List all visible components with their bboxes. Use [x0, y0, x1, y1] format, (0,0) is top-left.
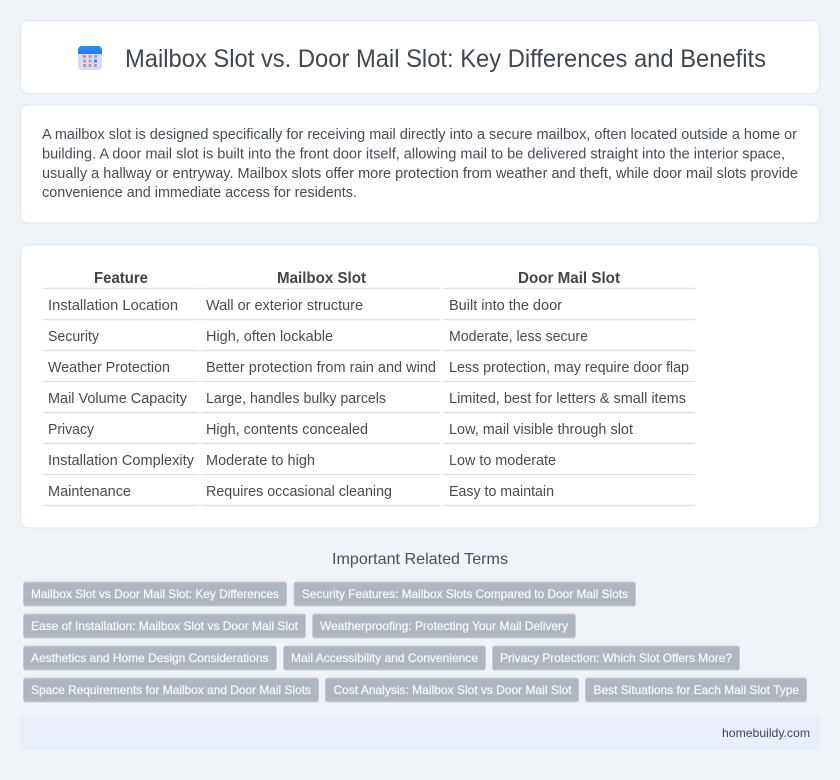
row: mail volume capacity: Mail Volume Capacity	[48, 391, 188, 407]
row: privacy	[48, 422, 633, 438]
intro paragraph: A mailbox slot is designed specifically for receiving mail directly into a secure mailbox, often located outside a home or	[42, 127, 797, 143]
tag: best situations	[586, 678, 806, 702]
tag: privacy protection	[492, 646, 740, 670]
row: installation location: Built into the door	[449, 298, 562, 314]
tag: accessibility: Mail Accessibility and Convenience	[291, 651, 478, 665]
tag: cost analysis	[326, 678, 578, 702]
table header row	[94, 270, 621, 287]
related term tags	[24, 582, 806, 702]
table header row: Feature	[94, 270, 148, 287]
tag: aesthetics: Aesthetics and Home Design Considerations	[31, 651, 268, 665]
heading: related terms: Important Related Terms	[332, 551, 508, 568]
row: weather protection: Less protection, may require door flap	[449, 360, 689, 376]
tag: weatherproofing	[312, 614, 576, 638]
row: mail volume capacity: Limited, best for letters & small items	[449, 391, 686, 407]
row: security	[48, 329, 588, 345]
row: privacy: Privacy	[48, 422, 95, 438]
row: maintenance	[48, 484, 554, 500]
tag: privacy protection: Privacy Protection: Which Slot Offers More?	[500, 651, 732, 665]
tag: space requirements: Space Requirements for Mailbox and Door Mail Slots	[31, 683, 311, 697]
row: security: Moderate, less secure	[449, 329, 588, 345]
tag: ease of installation	[24, 614, 306, 638]
row: installation complexity: Installation Complexity	[48, 453, 195, 469]
intro paragraph: building. A door mail slot is built into the front door itself, allowing mail to be delivered straight into the interior space,	[42, 146, 785, 162]
row: maintenance: Easy to maintain	[449, 484, 554, 500]
row: privacy: High, contents concealed	[206, 422, 368, 438]
row: installation complexity: Moderate to high	[206, 453, 315, 469]
panel: title header	[20, 20, 820, 94]
tag: ease of installation: Ease of Installation: Mailbox Slot vs Door Mail Slot	[31, 619, 299, 633]
row: mail volume capacity	[48, 391, 686, 407]
footer source: homebuildy.com	[722, 726, 810, 740]
tag: aesthetics	[24, 646, 276, 670]
row: security: Security	[48, 329, 100, 345]
intro paragraph	[42, 127, 798, 201]
icon: calendar grid	[78, 46, 102, 70]
row: weather protection: Better protection from rain and wind	[206, 360, 436, 376]
tag: security features	[294, 582, 636, 606]
intro paragraph: usually a hallway or entryway. Mailbox slots offer more protection from weather and theft, while door mail slots provide	[42, 166, 798, 182]
tag: key differences	[24, 582, 286, 606]
panel: intro text	[20, 105, 820, 223]
tag: accessibility	[284, 646, 486, 670]
tag: cost analysis: Cost Analysis: Mailbox Slot vs Door Mail Slot	[334, 683, 572, 697]
row: installation location	[48, 298, 562, 314]
panel: comparison table	[20, 245, 820, 528]
table header row: Mailbox Slot	[277, 270, 367, 287]
title: Mailbox Slot vs. Door Mail Slot: Key Differences and Benefits	[125, 45, 766, 73]
row: weather protection	[48, 360, 689, 376]
row: installation complexity: Low to moderate	[449, 453, 556, 469]
row: maintenance: Maintenance	[48, 484, 131, 500]
row: mail volume capacity: Large, handles bulky parcels	[206, 391, 386, 407]
tag: security features: Security Features: Mailbox Slots Compared to Door Mail Slots	[302, 587, 628, 601]
tag: key differences: Mailbox Slot vs Door Mail Slot: Key Differences	[31, 587, 279, 601]
row: installation location: Installation Location	[48, 298, 178, 314]
intro paragraph: convenience and immediate access for residents.	[42, 185, 357, 201]
row: privacy: Low, mail visible through slot	[449, 422, 633, 438]
row: installation complexity	[48, 453, 556, 469]
row: weather protection: Weather Protection	[48, 360, 170, 376]
row: installation location: Wall or exterior structure	[206, 298, 363, 314]
tag: weatherproofing: Weatherproofing: Protecting Your Mail Delivery	[320, 619, 568, 633]
tag: best situations: Best Situations for Each Mail Slot Type	[594, 683, 799, 697]
row: maintenance: Requires occasional cleaning	[206, 484, 392, 500]
row: security: High, often lockable	[206, 329, 333, 345]
tag: space requirements	[24, 678, 318, 702]
table header row: Door Mail Slot	[518, 270, 621, 287]
footer	[20, 716, 820, 750]
